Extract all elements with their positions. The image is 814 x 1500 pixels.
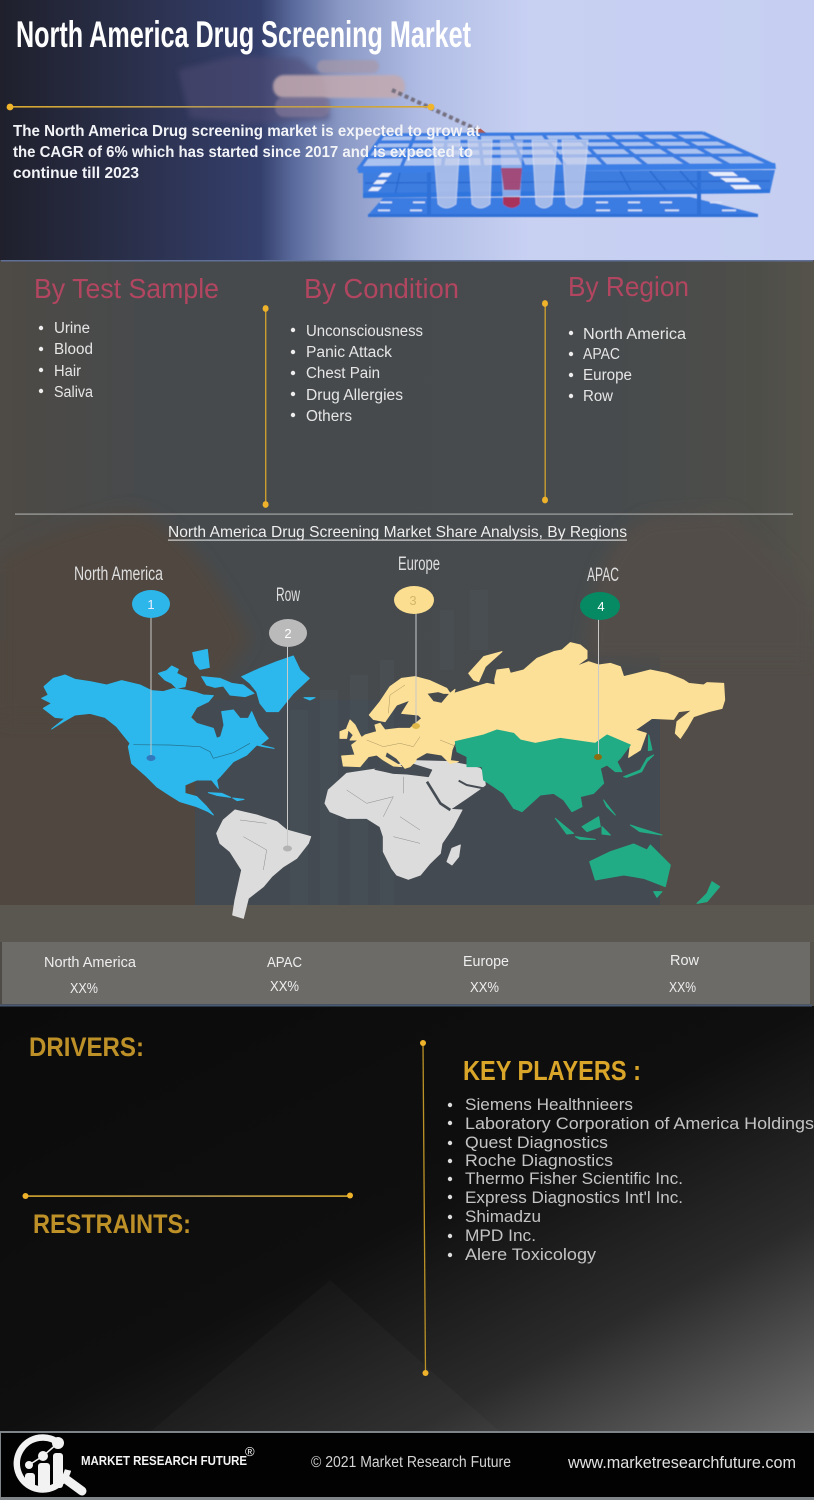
gold divider 2 <box>542 300 548 503</box>
list: key players: Siemens Healthnieers <box>465 1096 633 1114</box>
region: asia pacific <box>455 730 720 903</box>
list: Row <box>583 388 614 405</box>
list: key players: Thermo Fisher Scientific Inc. <box>465 1170 683 1188</box>
panel: market share band <box>2 942 810 1004</box>
share: europe: XX% <box>470 980 499 996</box>
test tubes <box>433 140 588 208</box>
list: Saliva <box>54 384 93 401</box>
list: Drug Allergies <box>306 387 403 404</box>
heading: restraints: RESTRAINTS: <box>33 1209 191 1239</box>
list: Panic Attack <box>306 344 392 361</box>
panel: segments and map background <box>0 260 814 1006</box>
share: europe <box>463 954 509 996</box>
map pin: row: 2 <box>284 626 292 641</box>
map pin: apac: 4 <box>597 599 605 614</box>
list: Hair <box>54 363 81 380</box>
map pin: europe: 3 <box>409 593 417 608</box>
share: apac: APAC <box>267 955 302 971</box>
list: Others <box>306 408 352 425</box>
heading: By Test Sample <box>34 273 219 304</box>
list: key players: Roche Diagnostics <box>465 1152 613 1170</box>
rack bottom layer <box>368 197 758 217</box>
map pin: apac <box>580 565 620 760</box>
map pin: apac: APAC <box>587 565 619 586</box>
rack top layer <box>358 133 776 173</box>
intro text: continue till 2023 <box>13 165 139 182</box>
intro text: The North America Drug screening market is expected to grow at <box>13 123 480 140</box>
intro text <box>13 123 480 182</box>
heading: By Region <box>568 271 689 302</box>
panel: footer <box>0 1431 814 1500</box>
panel: hero header <box>0 0 814 260</box>
list: Urine <box>54 320 90 337</box>
list: Unconsciousness <box>306 323 423 340</box>
rack middle layer <box>363 170 775 216</box>
heading: drivers: DRIVERS: <box>29 1032 144 1062</box>
region: north america <box>42 649 315 815</box>
map pin: north america: North America <box>74 564 163 585</box>
column: by region <box>568 271 689 405</box>
share: apac: XX% <box>270 979 299 995</box>
list: key players: MPD Inc. <box>465 1227 536 1245</box>
map pin: row <box>269 585 307 852</box>
intro text: the CAGR of 6% which has started since 2017 and is expected to <box>13 144 473 161</box>
list: Chest Pain <box>306 365 380 382</box>
illustration: hand holding pipette <box>178 56 490 139</box>
list: key players: Shimadzu <box>465 1208 541 1226</box>
region: latin america and africa-middle east <box>217 761 485 918</box>
brand name <box>81 1444 255 1468</box>
share: apac <box>267 955 302 995</box>
heading: By Condition <box>304 273 459 304</box>
share: europe: Europe <box>463 954 509 970</box>
heading: key players: KEY PLAYERS : <box>463 1055 641 1086</box>
website: www.marketresearchfuture.com <box>567 1454 796 1472</box>
share: north america: North America <box>44 955 137 971</box>
list: key players: Quest Diagnostics <box>465 1134 608 1152</box>
column: by condition <box>291 273 459 425</box>
region: europe and russia <box>340 643 725 768</box>
illustration: blue test tube rack <box>358 133 776 217</box>
map pin: europe <box>394 554 440 729</box>
map pin: europe: Europe <box>398 554 440 575</box>
share: row: XX% <box>669 980 696 996</box>
red sample tube <box>500 140 523 208</box>
map heading: North America Drug Screening Market Share Analysis, By Regions <box>168 524 627 541</box>
icon: market research future logo <box>17 1437 82 1491</box>
share: row <box>669 953 700 996</box>
list <box>39 320 93 401</box>
brand name: MARKET RESEARCH FUTURE <box>81 1454 247 1468</box>
panel: drivers, restraints and key players <box>0 1004 814 1432</box>
map pin: north america: 1 <box>147 597 155 612</box>
list <box>569 326 686 405</box>
list: Europe <box>583 367 632 384</box>
gold divider <box>7 104 434 110</box>
gold divider 1 <box>263 305 269 508</box>
gold divider horizontal <box>22 1192 353 1199</box>
map pin: row: Row <box>276 585 300 606</box>
list: key players: Alere Toxicology <box>465 1246 597 1264</box>
list <box>291 323 423 425</box>
column: by test sample <box>34 273 219 401</box>
copyright: © 2021 Market Research Future <box>311 1454 511 1471</box>
share: row: Row <box>670 953 700 969</box>
section divider line <box>15 514 793 515</box>
share: north america: XX% <box>70 981 98 997</box>
gold divider vertical <box>420 1040 428 1376</box>
share: north america <box>44 955 137 997</box>
title: North America Drug Screening Market <box>16 14 471 55</box>
list: North America <box>583 326 686 343</box>
list: key players: Express Diagnostics Int'l Inc. <box>465 1189 683 1207</box>
brand name: ® <box>245 1444 255 1459</box>
world map <box>42 643 725 918</box>
list: key players: Laboratory Corporation of America Holdings <box>465 1115 814 1133</box>
map pin: north america <box>74 564 170 761</box>
list: Blood <box>54 341 93 358</box>
list: key players <box>448 1096 814 1264</box>
list: APAC <box>583 346 620 363</box>
